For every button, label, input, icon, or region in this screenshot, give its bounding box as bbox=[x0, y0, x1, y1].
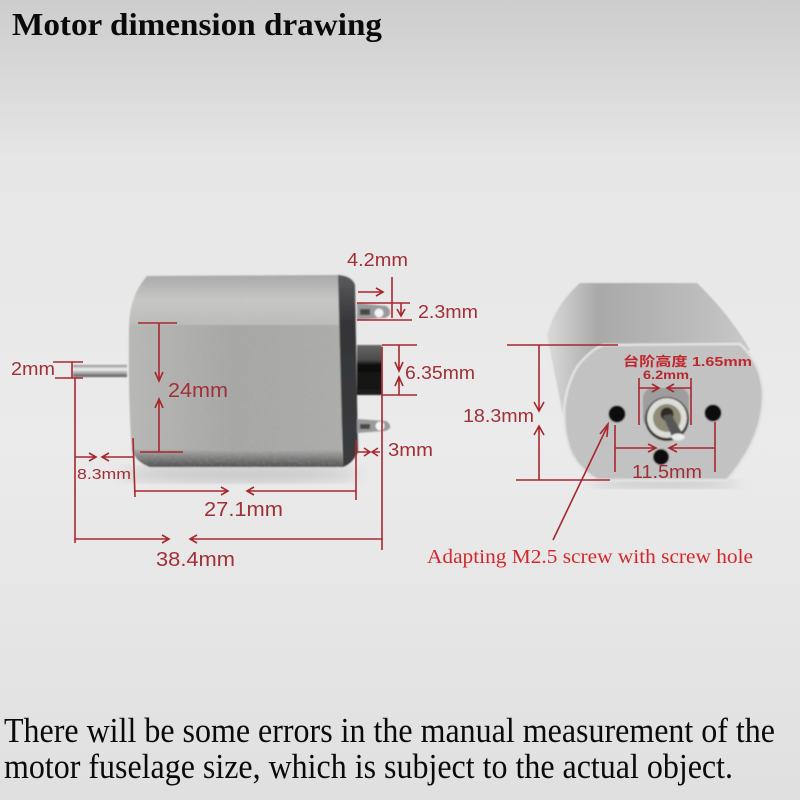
label 3mm: 3mm bbox=[388, 440, 433, 460]
body main face bbox=[129, 325, 342, 452]
label 2mm: 2mm bbox=[11, 359, 55, 379]
front shaft bbox=[663, 414, 684, 440]
bearing neck bbox=[643, 388, 689, 428]
body texture bbox=[146, 459, 342, 467]
4.2mm dimension bbox=[358, 277, 392, 318]
body top band bbox=[129, 275, 342, 325]
27.1mm dimension bbox=[135, 440, 356, 500]
label 38.4mm: 38.4mm bbox=[156, 549, 235, 571]
label 18.3mm: 18.3mm bbox=[463, 406, 534, 426]
shaft bbox=[73, 365, 127, 377]
8.3mm dimension bbox=[75, 438, 135, 497]
bearing bbox=[645, 397, 689, 441]
label 4.2mm: 4.2mm bbox=[347, 250, 408, 270]
face texture bbox=[555, 340, 767, 484]
top terminal bbox=[357, 303, 390, 320]
photo: motor side view bbox=[73, 272, 390, 482]
screw hole callout: Adapting M2.5 screw with screw hole bbox=[427, 546, 753, 568]
body lower band bbox=[132, 450, 343, 467]
2.3mm dimension bbox=[357, 303, 412, 320]
11.5mm dimension bbox=[615, 422, 715, 472]
dimensions: side view lines bbox=[53, 277, 417, 550]
screw holes bbox=[608, 406, 626, 422]
photo: motor front view bbox=[547, 283, 767, 488]
6.2mm dimension bbox=[639, 378, 691, 425]
2mm lines bbox=[53, 362, 83, 378]
label 11.5mm: 11.5mm bbox=[632, 462, 702, 482]
label 27.1mm: 27.1mm bbox=[204, 499, 283, 521]
dimension labels bbox=[11, 250, 752, 571]
38.4mm dimension bbox=[75, 347, 382, 550]
bottom terminal bbox=[357, 419, 390, 433]
label step height: 台阶高度 1.65mm bbox=[623, 354, 752, 369]
dimensions: front view lines bbox=[507, 345, 715, 540]
motor housing top bbox=[547, 283, 750, 430]
label 2.3mm: 2.3mm bbox=[418, 302, 478, 322]
label 6.35mm: 6.35mm bbox=[405, 363, 475, 383]
motor end face bbox=[564, 344, 763, 480]
18.3mm dimension bbox=[507, 345, 618, 480]
disclaimer note bbox=[4, 711, 775, 786]
6.35mm dimension bbox=[382, 345, 417, 395]
label 24mm: 24mm bbox=[168, 380, 228, 402]
gearbox boss bbox=[357, 345, 382, 395]
24mm dimension bbox=[138, 323, 183, 452]
3mm dimension bbox=[357, 448, 380, 456]
black end cap bbox=[338, 275, 358, 467]
label 8.3mm: 8.3mm bbox=[77, 466, 131, 483]
title: Motor dimension drawing bbox=[12, 6, 382, 42]
note line 2: motor fuselage size, which is subject to the actual object. bbox=[4, 747, 733, 786]
label 6.2mm: 6.2mm bbox=[643, 368, 689, 382]
screw hole pointer bbox=[553, 424, 608, 540]
